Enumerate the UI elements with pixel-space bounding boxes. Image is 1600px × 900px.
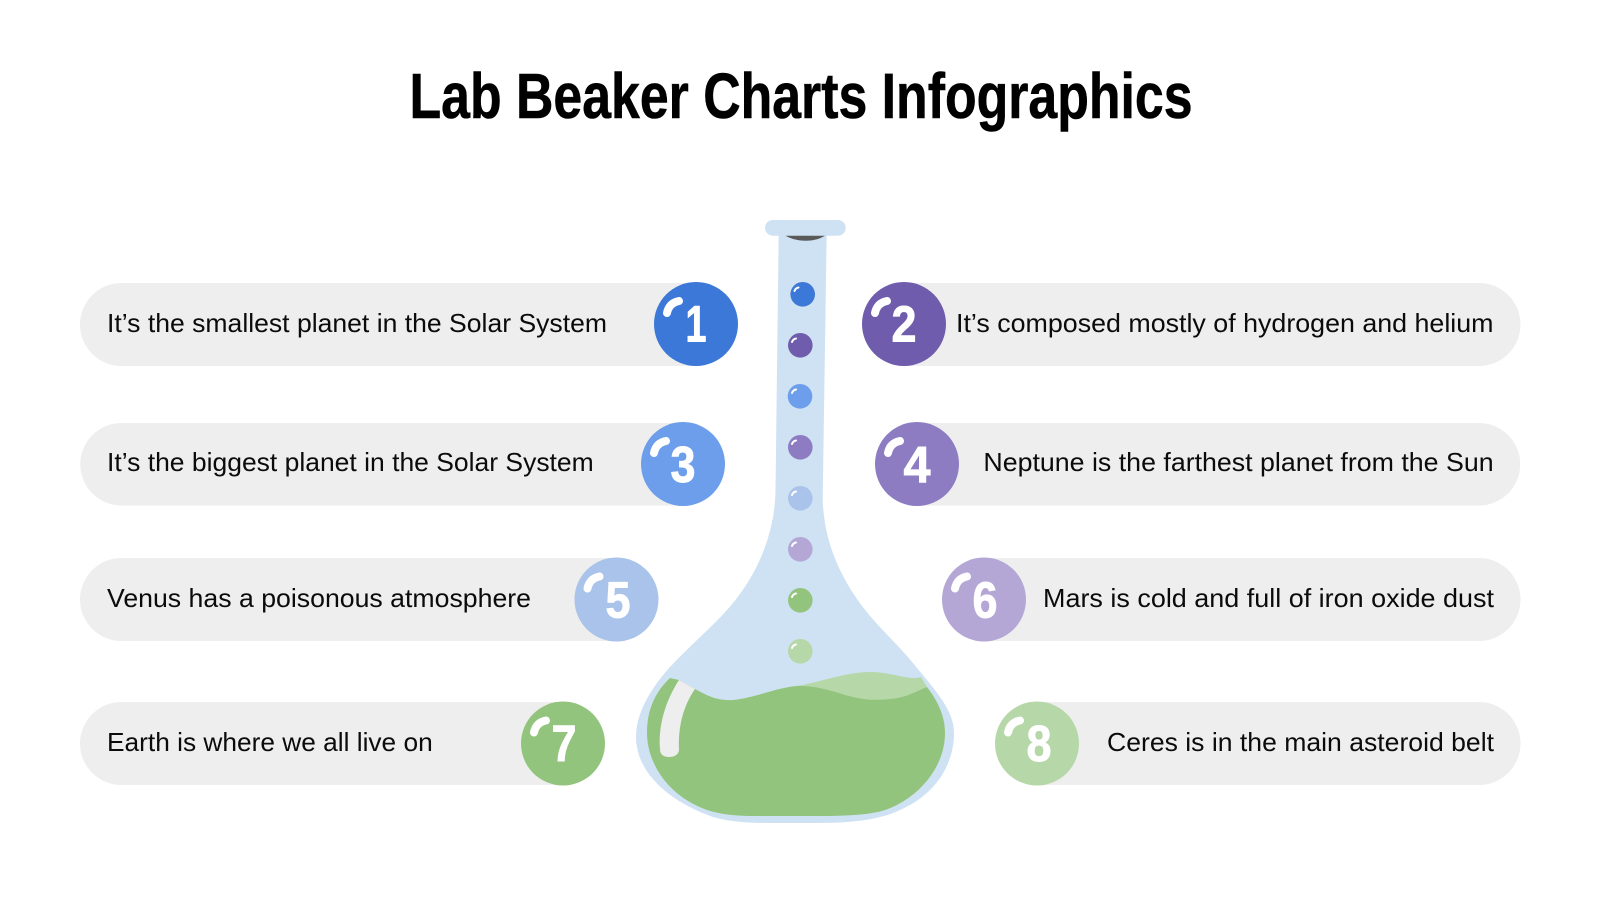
bubble 7 — [788, 588, 813, 613]
panel: item 1: It’s the smallest planet in the Solar System — [107, 308, 607, 338]
panel: item 2: 2 — [892, 296, 916, 352]
panel: item 5: 5 — [606, 572, 630, 628]
back liquid wave — [735, 672, 927, 705]
panel: item 4: 4 — [904, 436, 931, 493]
flask glass body — [636, 232, 954, 823]
panel: item 5: Venus has a poisonous atmosphere — [107, 583, 531, 613]
panel: item 7: Earth is where we all live on — [107, 727, 433, 757]
bubble 5 — [788, 486, 813, 511]
bubble 8 — [788, 639, 813, 664]
panel: item 6 — [942, 558, 1520, 642]
bubble 1 — [790, 282, 815, 307]
green liquid — [647, 678, 945, 816]
bubble 3 — [788, 384, 812, 409]
panel: item 7: 7 — [552, 715, 576, 772]
panel: item 2 — [862, 282, 1520, 366]
panel: item 3: 3 — [670, 436, 696, 493]
panel: item 5 — [80, 558, 658, 642]
panel: item 2: It’s composed mostly of hydrogen and helium — [956, 308, 1494, 338]
panel: item 7 — [80, 702, 605, 786]
panel: item 1 — [80, 282, 738, 366]
flask stopper shadow — [783, 234, 827, 241]
panel: item 4: Neptune is the farthest planet from the Sun — [983, 447, 1494, 477]
panel: item 8 — [995, 702, 1520, 786]
bubble 4 — [788, 435, 813, 460]
panel: item 6: 6 — [972, 572, 998, 628]
flask rim — [765, 220, 846, 236]
bubble 6 — [788, 537, 813, 562]
panel: item 8: Ceres is in the main asteroid belt — [1107, 727, 1495, 757]
panel: item 8: 8 — [1026, 715, 1052, 772]
panel: item 3: It’s the biggest planet in the Solar System — [107, 447, 594, 477]
panel: item 4 — [875, 422, 1520, 506]
glass reflection — [660, 680, 695, 757]
panel: item 1: 1 — [686, 296, 706, 352]
panel: item 3 — [80, 422, 725, 506]
title: Lab Beaker Charts Infographics — [410, 60, 1192, 132]
flask — [636, 220, 954, 823]
panel: item 6: Mars is cold and full of iron oxide dust — [1043, 583, 1495, 613]
bubble 2 — [788, 333, 813, 358]
